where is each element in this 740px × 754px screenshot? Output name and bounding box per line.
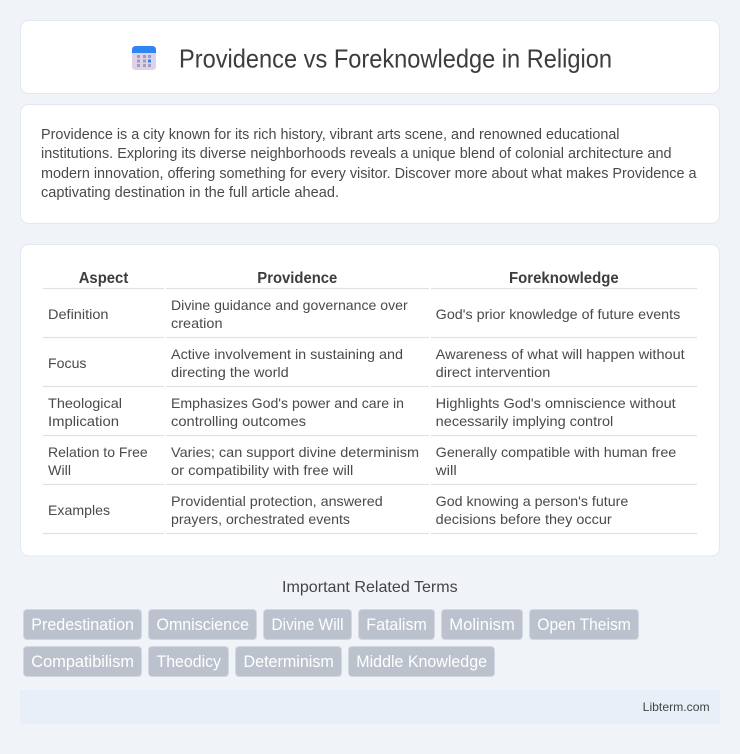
row: definition: creation [171,315,222,331]
icon: calendar [132,46,156,70]
row: focus: Focus [48,355,86,371]
panel: related term tags: Predestination [31,615,134,634]
table header: Aspect [79,270,129,287]
panel: related term tags: Omniscience [156,615,249,634]
row: examples [43,493,697,534]
row: theological implication: necessarily implying control [436,413,613,429]
panel: related term tags: Theodicy [156,652,222,671]
row: focus: direct intervention [436,364,550,380]
panel: related term tags [24,610,638,676]
panel: intro text: captivating destination in the full article ahead. [41,185,339,201]
row: theological implication: Highlights God's omniscience without [436,395,676,411]
row: examples: prayers, orchestrated events [171,511,350,527]
row: definition: Divine guidance and governance over [171,297,408,313]
row: examples: Examples [48,502,110,518]
panel: intro text: Providence is a city known for its rich history, vibrant arts scene, and renowned educational [41,127,620,143]
panel: related term tags: Fatalism [366,615,427,634]
row: theological implication [43,395,697,436]
row: focus [43,346,697,386]
table header: Foreknowledge [509,270,619,287]
panel: intro text: institutions. Exploring its diverse neighborhoods reveals a unique blend of colonial architecture and [41,146,672,162]
row: theological implication: controlling outcomes [171,413,306,429]
footer bar [20,690,720,724]
row: definition: Definition [48,306,108,322]
row: definition [43,297,697,338]
row: definition: God's prior knowledge of future events [436,306,680,322]
panel: related term tags: Divine Will [272,615,344,634]
panel: related term tags: Molinism [449,615,515,634]
row: relation to free will [43,444,697,484]
row: focus: Active involvement in sustaining and [171,346,403,362]
row: relation to free will: Generally compatible with human free [436,444,677,460]
row: relation to free will: or compatibility with free will [171,462,353,478]
panel: related term tags: Determinism [244,652,334,671]
panel: related term tags: Open Theism [537,615,631,634]
row: examples: decisions before they occur [436,511,612,527]
panel: related term tags: Compatibilism [31,652,134,671]
table header: Providence [257,270,337,287]
row: focus: Awareness of what will happen without [436,346,685,362]
heading: important related terms: Important Related Terms [282,579,458,596]
title: Providence vs Foreknowledge in Religion [179,46,612,74]
row: relation to free will: Will [48,462,71,478]
panel: comparison table [20,244,720,556]
row: theological implication: Emphasizes God's power and care in [171,395,404,411]
row: theological implication: Implication [48,413,119,429]
panel: title card [20,20,720,94]
row: focus: directing the world [171,364,289,380]
panel: intro text [20,104,720,224]
row: examples: God knowing a person's future [436,493,629,509]
panel: related term tags: Middle Knowledge [356,652,487,671]
row: examples: Providential protection, answered [171,493,383,509]
row: theological implication: Theological [48,395,122,411]
table header [43,270,697,288]
row: relation to free will: will [435,462,457,478]
footer bar: Libterm.com [643,700,710,714]
panel: intro text: modern innovation, offering something for every visitor. Discover more about what makes Providence a [41,166,697,182]
row: relation to free will: Varies; can support divine determinism [171,444,419,460]
row: relation to free will: Relation to Free [48,444,148,460]
